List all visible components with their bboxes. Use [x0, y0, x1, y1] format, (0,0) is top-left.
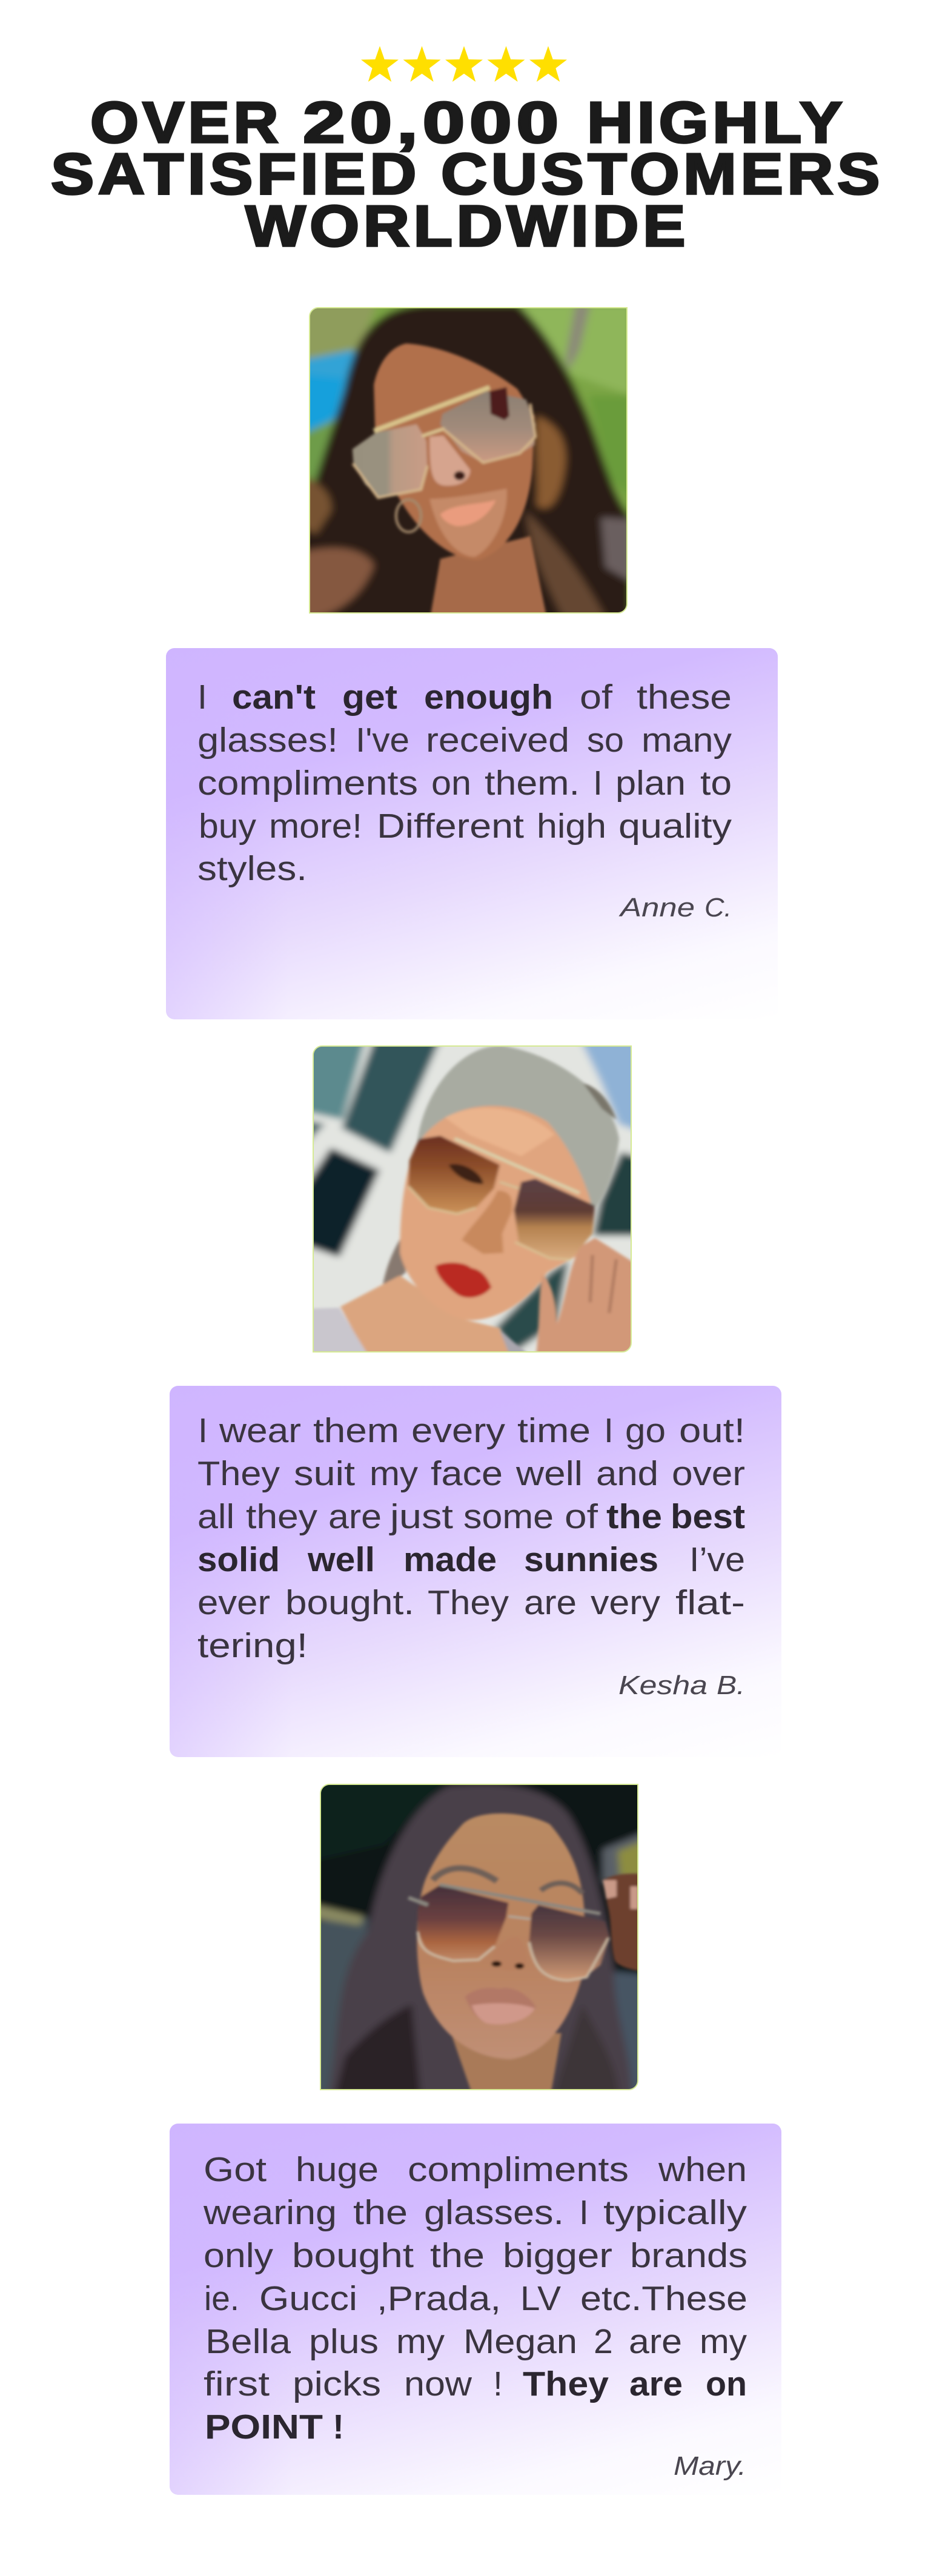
- author: Anne C.: Anne: [618, 893, 695, 922]
- title: SATISFIED: [51, 142, 420, 207]
- review text: of: [565, 1497, 598, 1536]
- review text: them: [313, 1411, 399, 1450]
- review text: time: [517, 1411, 591, 1450]
- review text: 2: [594, 2322, 613, 2361]
- review text: Megan: [463, 2322, 577, 2361]
- review text: high: [537, 807, 606, 846]
- photo: customer one wearing sunglasses with palm trees: [309, 307, 628, 614]
- title: CUSTOMERS: [441, 142, 884, 207]
- review text: well: [307, 1540, 375, 1579]
- review text: Gucci: [259, 2279, 357, 2318]
- review text: LV: [520, 2279, 561, 2318]
- review text: They: [197, 1454, 280, 1493]
- review text: compliments: [408, 2150, 629, 2189]
- review text: Different: [377, 807, 524, 846]
- review text: them.: [485, 764, 580, 803]
- review text: ever: [197, 1583, 270, 1622]
- review text: on: [706, 2365, 747, 2403]
- review text: my: [370, 1454, 419, 1493]
- review text: ,Prada,: [377, 2279, 501, 2318]
- review text: bought.: [285, 1583, 414, 1622]
- review text: I've: [356, 721, 409, 760]
- review text: I’ve: [689, 1540, 745, 1579]
- review text: and: [596, 1454, 658, 1493]
- panel: testimonial Mary.: [170, 2124, 781, 2495]
- review text: glasses!: [197, 721, 338, 760]
- author: Kesha B.: B.: [717, 1670, 745, 1700]
- review text: I: [604, 1411, 614, 1450]
- author: Kesha B.: Kesha: [618, 1670, 708, 1700]
- review text: out!: [679, 1411, 745, 1450]
- review text: every: [411, 1411, 506, 1450]
- author: Kesha B.: [618, 1670, 745, 1700]
- review text: [197, 678, 732, 888]
- photo: customer two with grey braids and red lips: [313, 1045, 632, 1353]
- review text: tering!: [197, 1626, 308, 1665]
- review text: to: [700, 764, 732, 803]
- review text: etc.These: [580, 2279, 747, 2318]
- review text: Got: [204, 2150, 267, 2189]
- review text: are: [524, 1583, 577, 1622]
- review text: of: [580, 678, 612, 717]
- review text: They: [523, 2365, 609, 2403]
- review text: suit: [294, 1454, 355, 1493]
- review text: !: [333, 2408, 344, 2446]
- photo: customer three in car with dark hair: [320, 1784, 638, 2090]
- review text: styles.: [197, 849, 307, 888]
- title: 20,000: [303, 91, 563, 155]
- review text: the: [430, 2236, 485, 2275]
- review text: they: [246, 1497, 318, 1536]
- title: WORLDWIDE: [245, 194, 689, 259]
- title: OVER: [90, 91, 282, 155]
- review text: on: [431, 764, 471, 803]
- review text: I: [198, 1411, 208, 1450]
- review text: well: [515, 1454, 583, 1493]
- review text: I: [579, 2193, 589, 2232]
- review text: bought: [292, 2236, 414, 2275]
- title: HIGHLY: [587, 91, 846, 155]
- review text: only: [204, 2236, 274, 2275]
- panel: testimonial Anne C.: [166, 648, 778, 1019]
- review text: quality: [618, 807, 732, 846]
- author: Anne C.: C.: [704, 893, 732, 922]
- review text: Bella: [205, 2322, 291, 2361]
- review text: go: [625, 1411, 666, 1450]
- review text: wear: [219, 1411, 301, 1450]
- review text: over: [672, 1454, 745, 1493]
- review text: my: [700, 2322, 747, 2361]
- author: Mary.: Mary.: [674, 2451, 746, 2481]
- review text: get: [342, 678, 397, 717]
- review text: are: [629, 2365, 683, 2403]
- review text: some: [463, 1497, 554, 1536]
- panel: testimonial Kesha B.: [170, 1386, 781, 1757]
- review text: They: [428, 1583, 509, 1622]
- review text: solid: [197, 1540, 280, 1579]
- review text: brands: [630, 2236, 747, 2275]
- review text: the: [606, 1497, 662, 1536]
- review text: so: [587, 721, 624, 760]
- review text: when: [658, 2150, 747, 2189]
- review text: bigger: [503, 2236, 612, 2275]
- review text: I: [197, 678, 207, 717]
- review text: just: [389, 1497, 453, 1536]
- review text: first: [204, 2365, 270, 2403]
- review text: POINT: [205, 2408, 323, 2446]
- review text: ie.: [204, 2279, 239, 2318]
- review text: more!: [269, 807, 362, 846]
- review text: can't: [232, 678, 316, 717]
- review text: glasses.: [424, 2193, 564, 2232]
- review text: [197, 1411, 745, 1665]
- icon: five star rating: [361, 46, 567, 82]
- review text: made: [403, 1540, 497, 1579]
- review text: these: [637, 678, 732, 717]
- review text: many: [641, 721, 732, 760]
- review text: wearing: [203, 2193, 337, 2232]
- review text: typically: [603, 2193, 747, 2232]
- review text: [203, 2150, 747, 2446]
- review text: plan: [615, 764, 686, 803]
- review text: compliments: [197, 764, 418, 803]
- review text: face: [431, 1454, 503, 1493]
- review text: very: [591, 1583, 661, 1622]
- review text: I: [593, 764, 603, 803]
- review text: all: [197, 1497, 234, 1536]
- author: Anne C.: [618, 893, 732, 922]
- review text: now: [404, 2365, 472, 2403]
- review text: buy: [199, 807, 257, 846]
- review text: received: [426, 721, 569, 760]
- title: [51, 91, 884, 259]
- review text: best: [671, 1497, 745, 1536]
- review text: the: [353, 2193, 408, 2232]
- review text: plus: [309, 2322, 379, 2361]
- review text: flat-: [675, 1583, 745, 1622]
- review text: are: [629, 2322, 682, 2361]
- review text: my: [396, 2322, 445, 2361]
- review text: picks: [293, 2365, 381, 2403]
- review text: are: [328, 1497, 382, 1536]
- review text: enough: [424, 678, 553, 717]
- review text: huge: [296, 2150, 379, 2189]
- review text: sunnies: [524, 1540, 658, 1579]
- review text: !: [493, 2365, 503, 2403]
